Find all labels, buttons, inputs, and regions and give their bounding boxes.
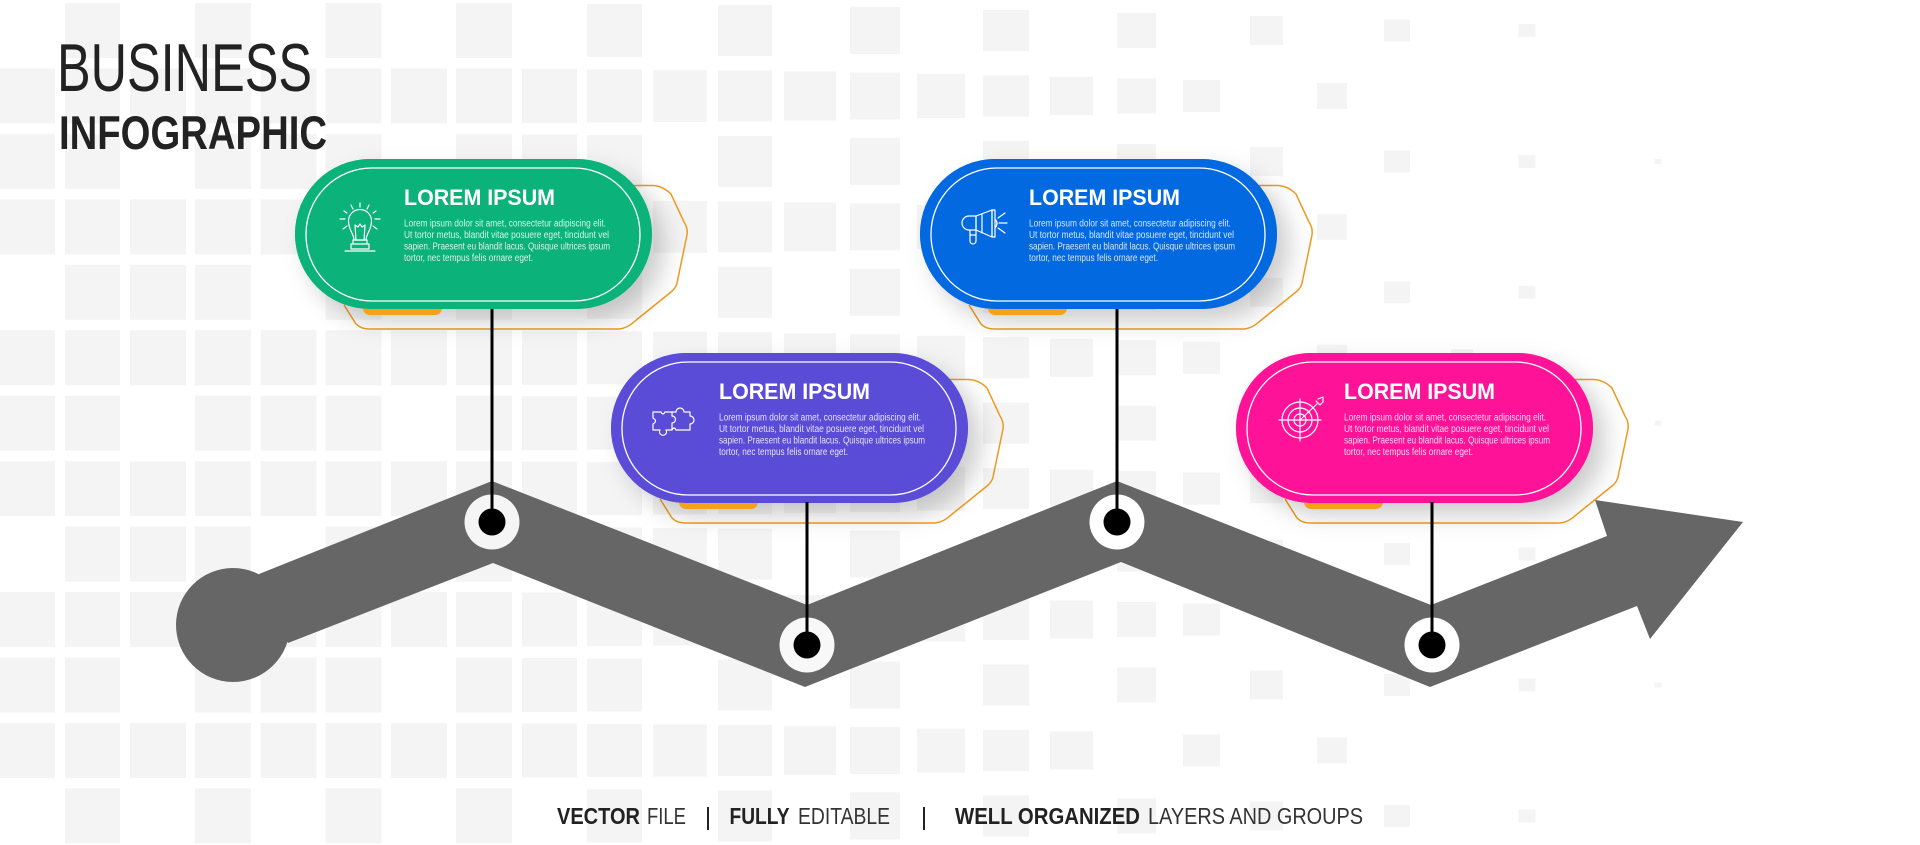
panel: green card: [295, 159, 687, 329]
node: second peak with connector: [1090, 309, 1144, 550]
panel: pink card: sapien. Praesent eu blandit lacus. Quisque ultrices ipsum: [1344, 436, 1550, 446]
panel: green card: Lorem ipsum dolor sit amet, consectetur adipiscing elit.: [404, 218, 606, 230]
panel: blue card: Ut tortor metus, blandit vitae posuere eget, tincidunt vel: [1029, 230, 1234, 241]
panel: pink card: Ut tortor metus, blandit vitae posuere eget, tincidunt vel: [1344, 424, 1549, 435]
icon: puzzle pieces: [653, 408, 694, 435]
footer caption: FILE: [647, 803, 686, 829]
panel: purple card: Lorem ipsum dolor sit amet, consectetur adipiscing elit.: [719, 412, 921, 424]
panel: purple card: [611, 353, 1003, 523]
icon: megaphone: [962, 210, 1007, 244]
title: INFOGRAPHIC: [59, 106, 327, 159]
panel: pink card: LOREM IPSUM: [1344, 379, 1495, 404]
panel: purple card: sapien. Praesent eu blandit lacus. Quisque ultrices ipsum: [719, 436, 925, 446]
node: first valley with connector: [780, 502, 834, 672]
footer caption: VECTOR: [557, 803, 640, 829]
panel: pink card: [1236, 353, 1628, 523]
footer caption: FULLY: [730, 803, 790, 829]
panel: purple card: Ut tortor metus, blandit vitae posuere eget, tincidunt vel: [719, 424, 924, 435]
panel: green card: LOREM IPSUM: [404, 185, 555, 210]
panel: blue card: LOREM IPSUM: [1029, 185, 1180, 210]
panel: green card: Ut tortor metus, blandit vitae posuere eget, tincidunt vel: [404, 230, 609, 241]
node: first peak with connector: [464, 309, 520, 550]
panel: pink card: Lorem ipsum dolor sit amet, consectetur adipiscing elit.: [1344, 412, 1546, 424]
panel: purple card: tortor, nec tempus felis ornare eget.: [719, 447, 848, 458]
title: BUSINESS: [57, 30, 312, 106]
icon: target: [1279, 397, 1323, 441]
panel: blue card: tortor, nec tempus felis ornare eget.: [1029, 253, 1158, 264]
footer caption: WELL ORGANIZED: [955, 803, 1140, 829]
panel: green card: tortor, nec tempus felis ornare eget.: [404, 253, 533, 264]
node: second valley with connector: [1404, 502, 1460, 672]
icon: light bulb: [340, 203, 380, 251]
footer caption: [557, 803, 1363, 830]
panel: green card: sapien. Praesent eu blandit lacus. Quisque ultrices ipsum: [404, 242, 610, 252]
title: [57, 30, 327, 159]
footer caption: LAYERS AND GROUPS: [1148, 803, 1363, 829]
panel: pink card: tortor, nec tempus felis ornare eget.: [1344, 447, 1473, 458]
panel: blue card: sapien. Praesent eu blandit lacus. Quisque ultrices ipsum: [1029, 242, 1235, 252]
footer caption: EDITABLE: [798, 803, 890, 829]
panel: blue card: [920, 159, 1312, 329]
panel: blue card: Lorem ipsum dolor sit amet, consectetur adipiscing elit.: [1029, 218, 1231, 230]
panel: purple card: LOREM IPSUM: [719, 379, 870, 404]
arrow: zigzag growth path: [176, 481, 1743, 687]
